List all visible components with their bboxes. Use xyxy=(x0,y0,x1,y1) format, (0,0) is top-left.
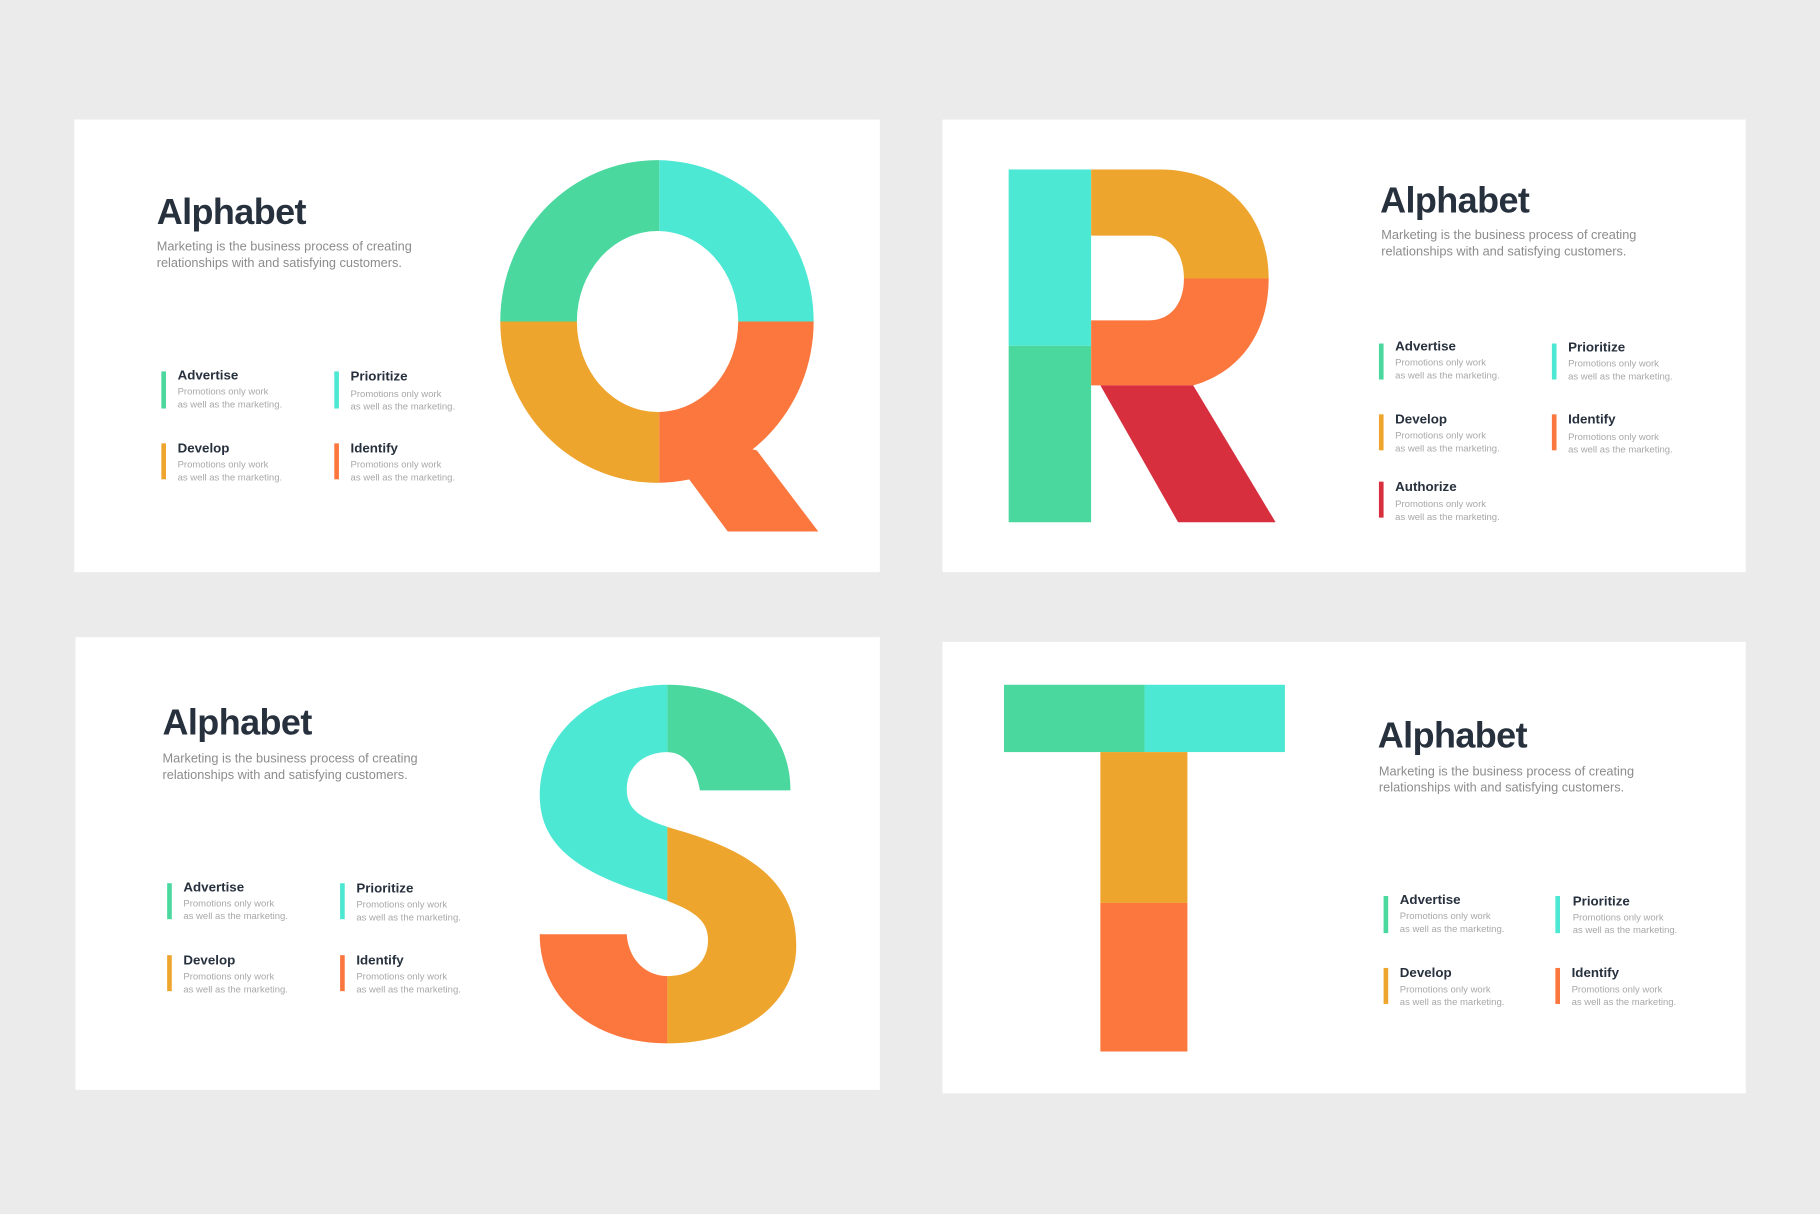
item: Prioritize xyxy=(1555,893,1677,936)
item: Identify: Promotions only work xyxy=(1572,984,1663,995)
item: Develop: Develop xyxy=(183,952,235,967)
title T: Alphabet xyxy=(1378,714,1528,755)
item: Identify: Identify xyxy=(351,441,399,456)
subtitle S: relationships with and satisfying customers. xyxy=(162,767,408,782)
item: Develop: Develop xyxy=(1400,965,1452,980)
panel: Q xyxy=(74,120,880,572)
item: Identify: Identify xyxy=(356,952,404,967)
item: Prioritize: Promotions only work xyxy=(1568,359,1659,370)
item: Prioritize: Prioritize xyxy=(1568,340,1625,355)
item: Develop: Promotions only work xyxy=(183,972,274,983)
item: Advertise xyxy=(167,879,288,922)
item: Develop xyxy=(161,441,282,483)
item: Develop: Promotions only work xyxy=(178,460,269,471)
item: Authorize: Authorize xyxy=(1395,479,1457,494)
item: Develop: Promotions only work xyxy=(1400,984,1491,995)
item: Identify xyxy=(334,441,455,483)
item: Identify: as well as the marketing. xyxy=(1572,997,1676,1008)
item: Identify xyxy=(1555,965,1676,1008)
item: Prioritize: Prioritize xyxy=(356,881,413,896)
item: Develop: Promotions only work xyxy=(1395,431,1486,442)
item: Advertise: as well as the marketing. xyxy=(1400,924,1504,935)
item: Identify: as well as the marketing. xyxy=(356,984,461,995)
item: Advertise: Advertise xyxy=(1400,892,1461,907)
item: Develop xyxy=(1379,412,1500,454)
title Q: Alphabet xyxy=(157,191,307,232)
subtitle T: Marketing is the business process of creating xyxy=(1379,763,1634,778)
item: Advertise xyxy=(1379,339,1500,381)
item: Identify: Promotions only work xyxy=(356,972,447,983)
panel: T xyxy=(942,642,1746,1093)
item: Prioritize: Promotions only work xyxy=(1573,912,1664,923)
letter Q xyxy=(500,160,818,532)
item: Advertise: Promotions only work xyxy=(1400,911,1491,922)
letter S xyxy=(540,685,796,1043)
title S: Alphabet xyxy=(162,702,312,743)
item: Authorize: as well as the marketing. xyxy=(1395,512,1500,523)
panel: S xyxy=(75,637,880,1090)
item: Prioritize: Prioritize xyxy=(351,369,408,384)
item: Prioritize xyxy=(334,369,455,413)
panel: R xyxy=(942,120,1746,572)
item: Advertise: as well as the marketing. xyxy=(1395,370,1500,381)
item: Prioritize: as well as the marketing. xyxy=(1568,372,1673,383)
item: Advertise: Advertise xyxy=(183,879,244,894)
item: Develop xyxy=(167,952,288,995)
item: Develop xyxy=(1384,965,1504,1008)
item: Prioritize: Prioritize xyxy=(1573,893,1630,908)
item: Identify: Identify xyxy=(1568,412,1616,427)
item: Advertise: Promotions only work xyxy=(183,898,274,909)
letter T xyxy=(1004,685,1285,1052)
item: Advertise: Promotions only work xyxy=(178,387,269,398)
subtitle Q: Marketing is the business process of creating xyxy=(157,239,412,254)
item: Advertise: as well as the marketing. xyxy=(183,911,288,922)
item: Prioritize: as well as the marketing. xyxy=(356,912,461,923)
item: Prioritize: Promotions only work xyxy=(351,389,442,400)
item: Identify xyxy=(1552,412,1673,456)
item: Advertise: Advertise xyxy=(178,368,238,383)
item: Identify: Identify xyxy=(1572,965,1620,980)
item: Advertise: Advertise xyxy=(1395,339,1456,354)
item: Prioritize xyxy=(1552,340,1673,383)
item: Develop: as well as the marketing. xyxy=(178,472,282,483)
item: Identify: Promotions only work xyxy=(351,460,442,471)
item: Identify xyxy=(340,952,461,995)
item: Advertise: Promotions only work xyxy=(1395,358,1486,369)
item: Identify: Promotions only work xyxy=(1568,432,1659,443)
item: Advertise xyxy=(161,368,282,410)
item: Authorize: Promotions only work xyxy=(1395,499,1486,510)
subtitle Q: relationships with and satisfying customers. xyxy=(157,255,402,270)
item: Authorize xyxy=(1379,479,1500,523)
subtitle R: Marketing is the business process of creating xyxy=(1381,227,1636,242)
item: Develop: as well as the marketing. xyxy=(183,984,288,995)
item: Identify: as well as the marketing. xyxy=(351,472,455,483)
item: Prioritize: as well as the marketing. xyxy=(351,402,455,413)
item: Develop: Develop xyxy=(1395,412,1447,427)
letter R xyxy=(1009,169,1276,522)
subtitle T: relationships with and satisfying customers. xyxy=(1379,780,1624,795)
item: Develop: as well as the marketing. xyxy=(1395,443,1500,454)
item: Advertise xyxy=(1384,892,1504,935)
item: Develop: as well as the marketing. xyxy=(1400,997,1504,1008)
item: Identify: as well as the marketing. xyxy=(1568,445,1673,456)
item: Prioritize: as well as the marketing. xyxy=(1573,925,1677,936)
title R: Alphabet xyxy=(1380,179,1530,220)
subtitle R: relationships with and satisfying customers. xyxy=(1381,243,1626,258)
item: Advertise: as well as the marketing. xyxy=(178,399,282,410)
item: Prioritize xyxy=(340,881,461,923)
item: Prioritize: Promotions only work xyxy=(356,900,447,911)
item: Develop: Develop xyxy=(178,441,229,456)
subtitle S: Marketing is the business process of creating xyxy=(162,751,418,766)
